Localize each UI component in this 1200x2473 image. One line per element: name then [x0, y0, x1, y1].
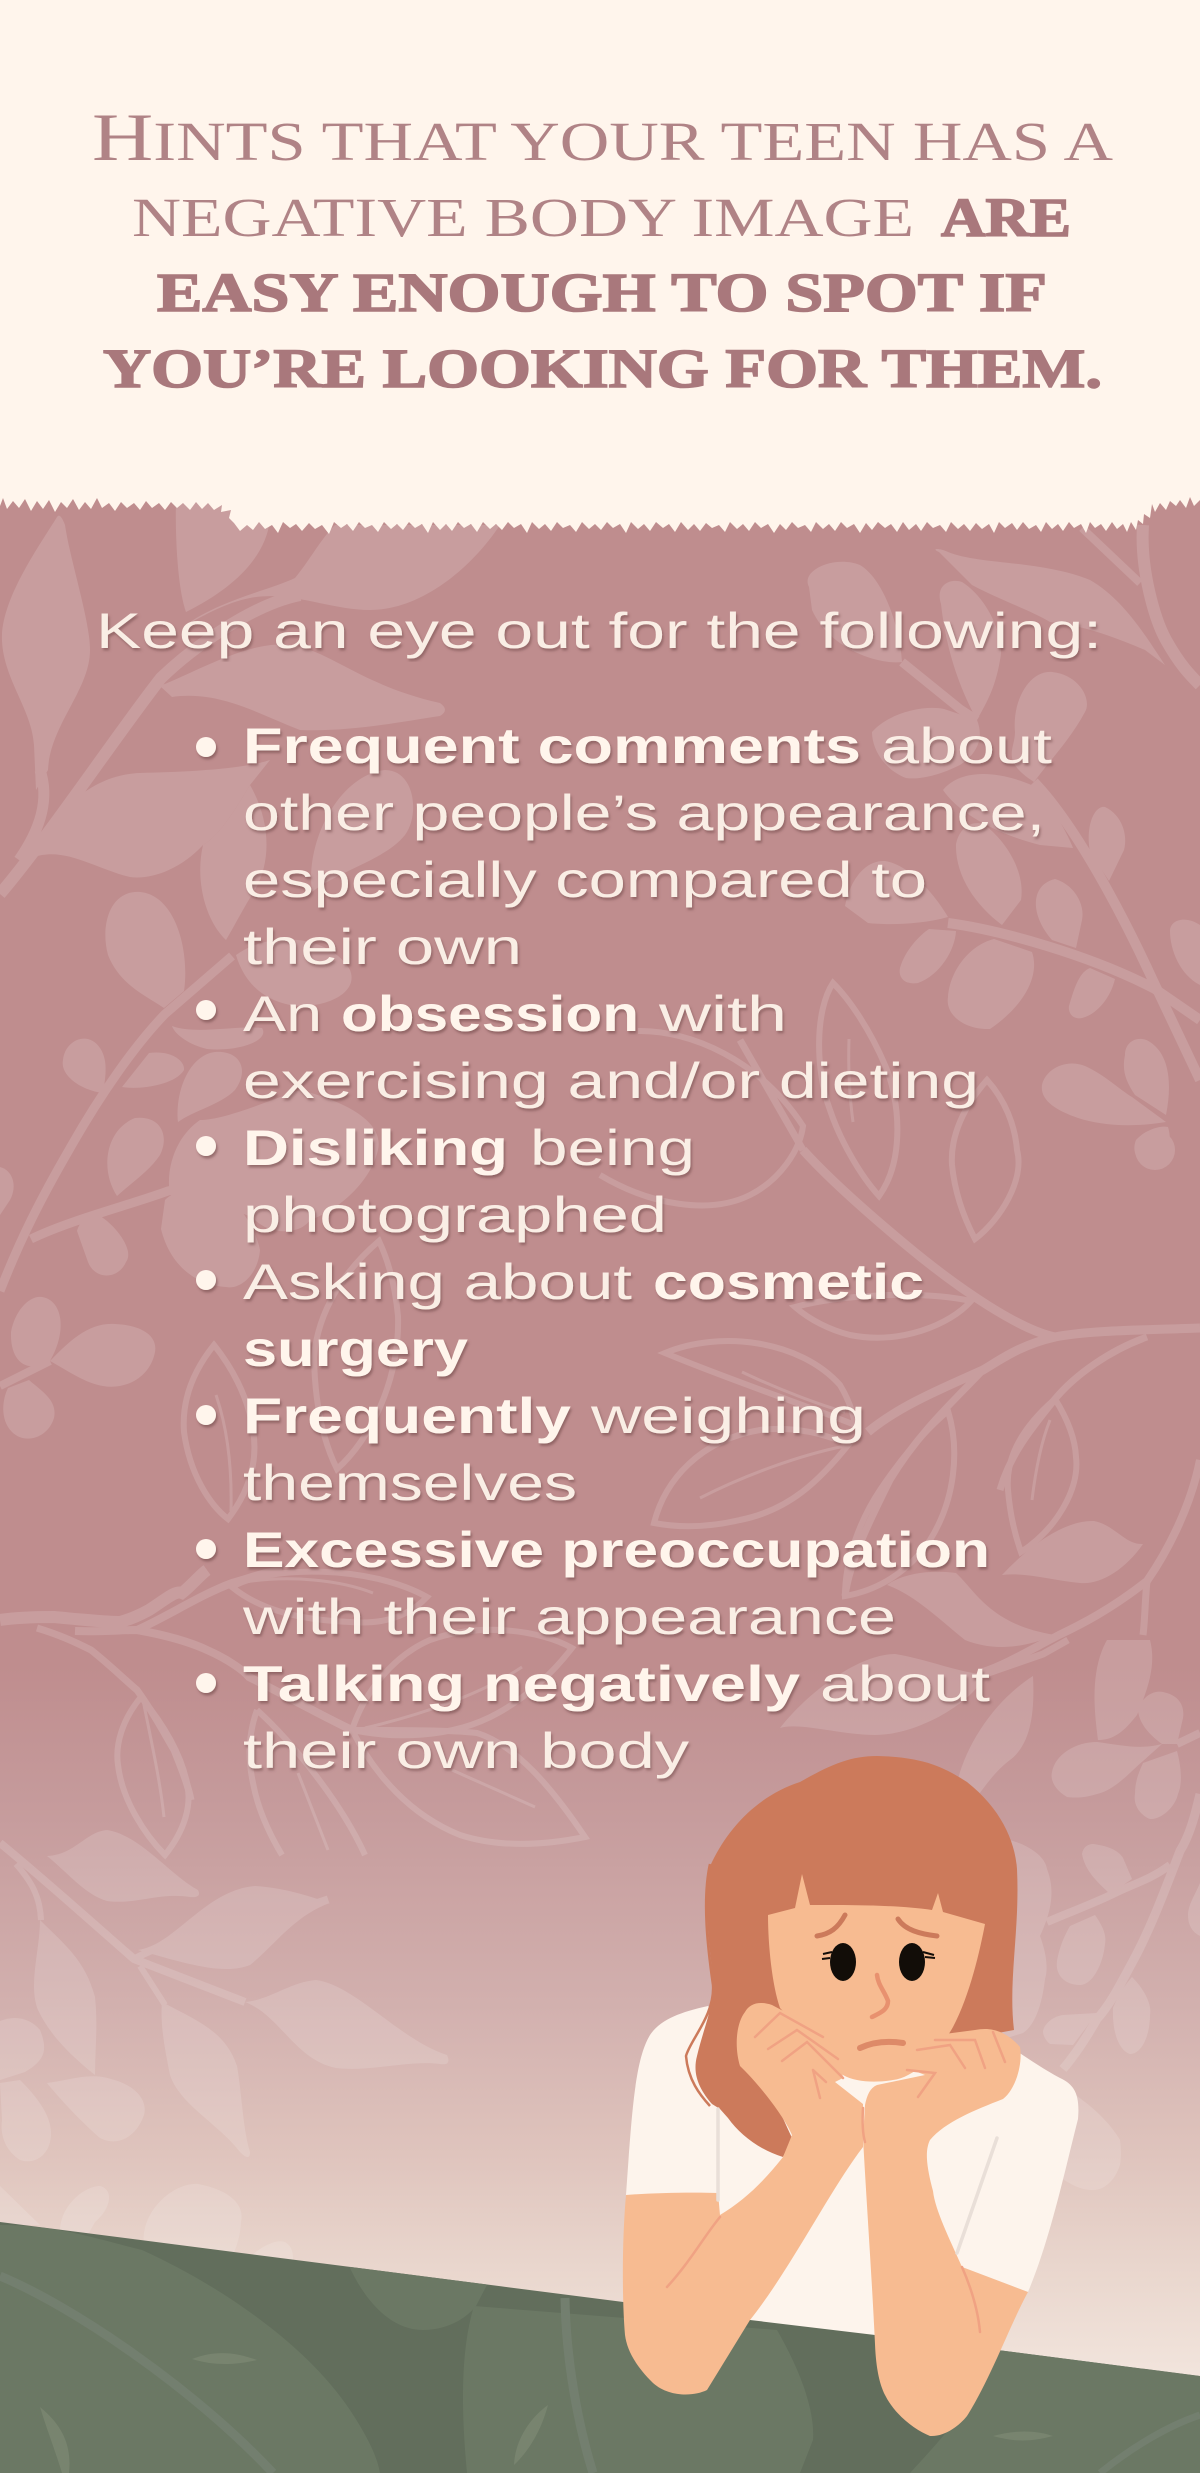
- shirt fold lines: [718, 2109, 997, 2253]
- item: obsession: [196, 986, 979, 1109]
- background botanical pattern: [0, 500, 1200, 2270]
- item: disliking: photographed: [243, 1187, 667, 1243]
- item: cosmetic surgery: cosmetic: [653, 1254, 924, 1310]
- item: disliking: Disliking: [243, 1120, 508, 1176]
- hair: [695, 1756, 1017, 2157]
- heading: YOU’RE LOOKING FOR THEM.: [103, 338, 1102, 399]
- item: frequently weighing: Frequently: [243, 1388, 571, 1444]
- intro line: Keep an eye out for the following:: [96, 603, 1102, 659]
- item: excessive preoccupation: [196, 1522, 990, 1645]
- illustration: worried girl leaning on her hands: [623, 1756, 1078, 2436]
- item: frequently weighing: [196, 1388, 866, 1511]
- left arm and hand: [623, 2003, 863, 2394]
- item: obsession: with: [658, 986, 787, 1042]
- mouth: [860, 2042, 903, 2048]
- table leaf pattern: [0, 2225, 1200, 2473]
- item: excessive preoccupation: Excessive preoccupation: [243, 1522, 990, 1578]
- heading: NEGATIVE BODY IMAGE: [132, 187, 914, 248]
- panel: green table: [0, 2222, 1200, 2473]
- heading: HINTS THAT YOUR TEEN HAS A: [92, 99, 1113, 175]
- item: talking negatively: [196, 1656, 990, 1779]
- item: frequently weighing: weighing: [590, 1388, 866, 1444]
- item: frequent comments: Frequent comments: [243, 718, 861, 774]
- item: excessive preoccupation: with their appearance: [242, 1589, 896, 1645]
- item: obsession: An: [243, 986, 322, 1042]
- item: frequently weighing: themselves: [243, 1455, 577, 1511]
- item: obsession: exercising and/or dieting: [243, 1053, 979, 1109]
- item: cosmetic surgery: surgery: [243, 1321, 468, 1377]
- nose: [872, 1975, 888, 2017]
- item: obsession: obsession: [341, 986, 639, 1042]
- heading: [92, 99, 1113, 399]
- item: cosmetic surgery: Asking about: [243, 1254, 632, 1310]
- hand and arm crease lines: [667, 2013, 1005, 2332]
- item: talking negatively: Talking negatively: [243, 1656, 800, 1712]
- hair strand: [686, 1864, 713, 2106]
- heading: EASY ENOUGH TO SPOT IF: [157, 262, 1047, 323]
- item: frequent comments: about: [881, 718, 1052, 774]
- item: frequent comments: especially compared to: [243, 852, 927, 908]
- item: disliking: being: [530, 1120, 695, 1176]
- heading: ARE: [941, 187, 1071, 248]
- t-shirt: [626, 2006, 1078, 2335]
- item: talking negatively: about: [820, 1656, 990, 1712]
- item: talking negatively: their own body: [243, 1723, 689, 1779]
- item: frequent comments: [196, 718, 1052, 975]
- right arm and hand: [863, 2029, 1028, 2436]
- item: frequent comments: their own: [243, 919, 522, 975]
- eyes: [822, 1943, 935, 1981]
- item: disliking: [196, 1120, 695, 1243]
- item: frequent comments: other people’s appearance,: [243, 785, 1045, 841]
- bullet list: [196, 718, 1052, 1779]
- eyebrows: [817, 1915, 937, 1936]
- panel: cream header with torn edge: [0, 0, 1200, 534]
- face: [768, 1874, 985, 2082]
- item: cosmetic surgery: [196, 1254, 924, 1377]
